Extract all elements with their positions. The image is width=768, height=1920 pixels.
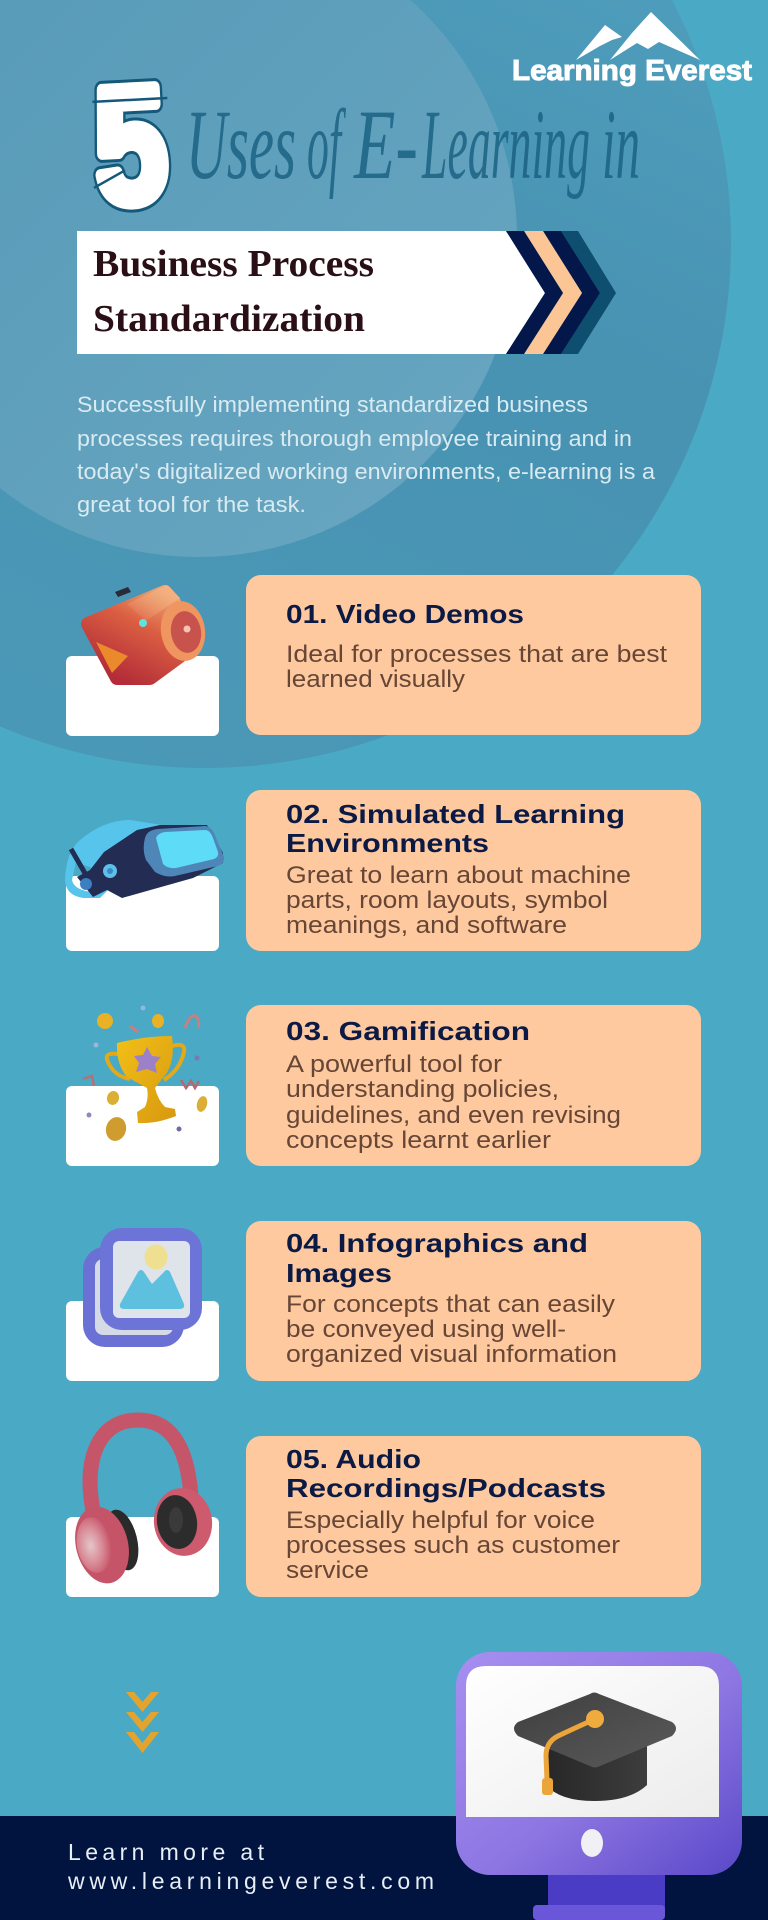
arrow: triple down chevrons — [126, 1692, 159, 1753]
card — [246, 790, 701, 951]
card heading — [286, 1444, 606, 1503]
intro paragraph: great tool for the task. — [77, 492, 306, 517]
banner line one: Business Process — [93, 243, 374, 285]
card heading: 02. Simulated Learning — [286, 799, 625, 829]
card description — [286, 1291, 617, 1368]
icon: headphones — [67, 1420, 216, 1589]
word: Uses — [186, 89, 296, 200]
card heading: Environments — [286, 828, 489, 858]
item 02: Simulated Learning Environments — [65, 790, 701, 951]
footer text: Learn more at — [68, 1839, 265, 1865]
icon: video camera — [88, 585, 209, 678]
numeral face: 5 — [90, 51, 172, 239]
item 01: Video Demos — [66, 575, 701, 736]
card heading: Images — [286, 1258, 392, 1288]
numeral outline: 5 — [90, 51, 172, 239]
white tile — [66, 1086, 219, 1166]
banner: Business Process Standardization — [77, 231, 616, 354]
white tile — [66, 876, 219, 951]
item 05: Audio Recordings/Podcasts — [66, 1420, 701, 1597]
banner white arrow — [77, 231, 545, 354]
card description — [286, 862, 631, 939]
monitor body — [456, 1652, 742, 1875]
card — [246, 1221, 701, 1381]
card heading: Recordings/Podcasts — [286, 1473, 606, 1503]
graduation cap — [514, 1692, 676, 1801]
icon: computer monitor with graduation cap — [456, 1652, 742, 1920]
title: numeral 5 — [87, 51, 174, 239]
card heading: 03. Gamification — [286, 1016, 530, 1046]
title: script line — [186, 89, 640, 200]
card heading — [286, 799, 625, 858]
card heading: 01. Video Demos — [286, 599, 524, 629]
card — [246, 575, 701, 735]
card description — [286, 1051, 621, 1154]
card description: concepts learnt earlier — [286, 1127, 551, 1154]
banner line two: Standardization — [93, 298, 365, 340]
logo: Learning Everest — [512, 12, 752, 87]
chevron stripes — [506, 231, 616, 354]
card description: Especially helpful for voice — [286, 1507, 595, 1534]
card description: understanding policies, — [286, 1076, 559, 1103]
intro paragraph: today's digitalized working environments, e-learning is a — [77, 459, 656, 484]
background: large dark circle — [0, 0, 731, 768]
item 03: Gamification — [66, 1005, 701, 1166]
card heading — [286, 1228, 588, 1288]
card description: guidelines, and even revising — [286, 1102, 621, 1129]
white tile — [66, 656, 219, 736]
monitor stand — [548, 1870, 665, 1910]
footer text — [67, 1839, 434, 1894]
card description: meanings, and software — [286, 912, 567, 939]
card description: For concepts that can easily — [286, 1291, 615, 1318]
numeral bevel marks — [89, 98, 172, 188]
footer band — [0, 1816, 768, 1920]
intro paragraph: processes requires thorough employee training and in — [77, 426, 632, 451]
intro paragraph: Successfully implementing standardized business — [77, 392, 588, 417]
card description — [286, 1507, 620, 1584]
power button — [581, 1829, 603, 1857]
white tile — [66, 1517, 219, 1597]
monitor screen — [466, 1666, 719, 1817]
card description: Ideal for processes that are best — [286, 641, 667, 668]
card description: learned visually — [286, 666, 465, 693]
card description: A powerful tool for — [286, 1051, 502, 1078]
card — [246, 1436, 701, 1597]
card description: processes such as customer — [286, 1532, 620, 1559]
card heading: 04. Infographics and — [286, 1228, 588, 1258]
item 04: Infographics and Images — [66, 1221, 701, 1381]
card description: be conveyed using well- — [286, 1316, 566, 1343]
icon: VR headset — [65, 820, 224, 898]
word: E- — [353, 89, 418, 200]
icon: trophy — [83, 1006, 209, 1143]
card description — [286, 641, 667, 693]
word: of — [307, 89, 346, 200]
monitor base — [533, 1905, 665, 1920]
logo wordmark: Learning Everest — [512, 55, 752, 87]
card heading: 05. Audio — [286, 1444, 421, 1474]
white tile — [66, 1301, 219, 1381]
card description: organized visual information — [286, 1341, 617, 1368]
text: in — [602, 89, 640, 200]
icon: stacked images — [83, 1228, 202, 1347]
card description: service — [286, 1557, 369, 1584]
intro paragraph — [77, 392, 656, 517]
card description: Great to learn about machine — [286, 862, 631, 889]
background: lighter inner circle — [0, 0, 517, 557]
card — [246, 1005, 701, 1166]
card description: parts, room layouts, symbol — [286, 887, 608, 914]
footer text: www.learningeverest.com — [67, 1868, 434, 1894]
icon: mountains — [576, 12, 700, 60]
